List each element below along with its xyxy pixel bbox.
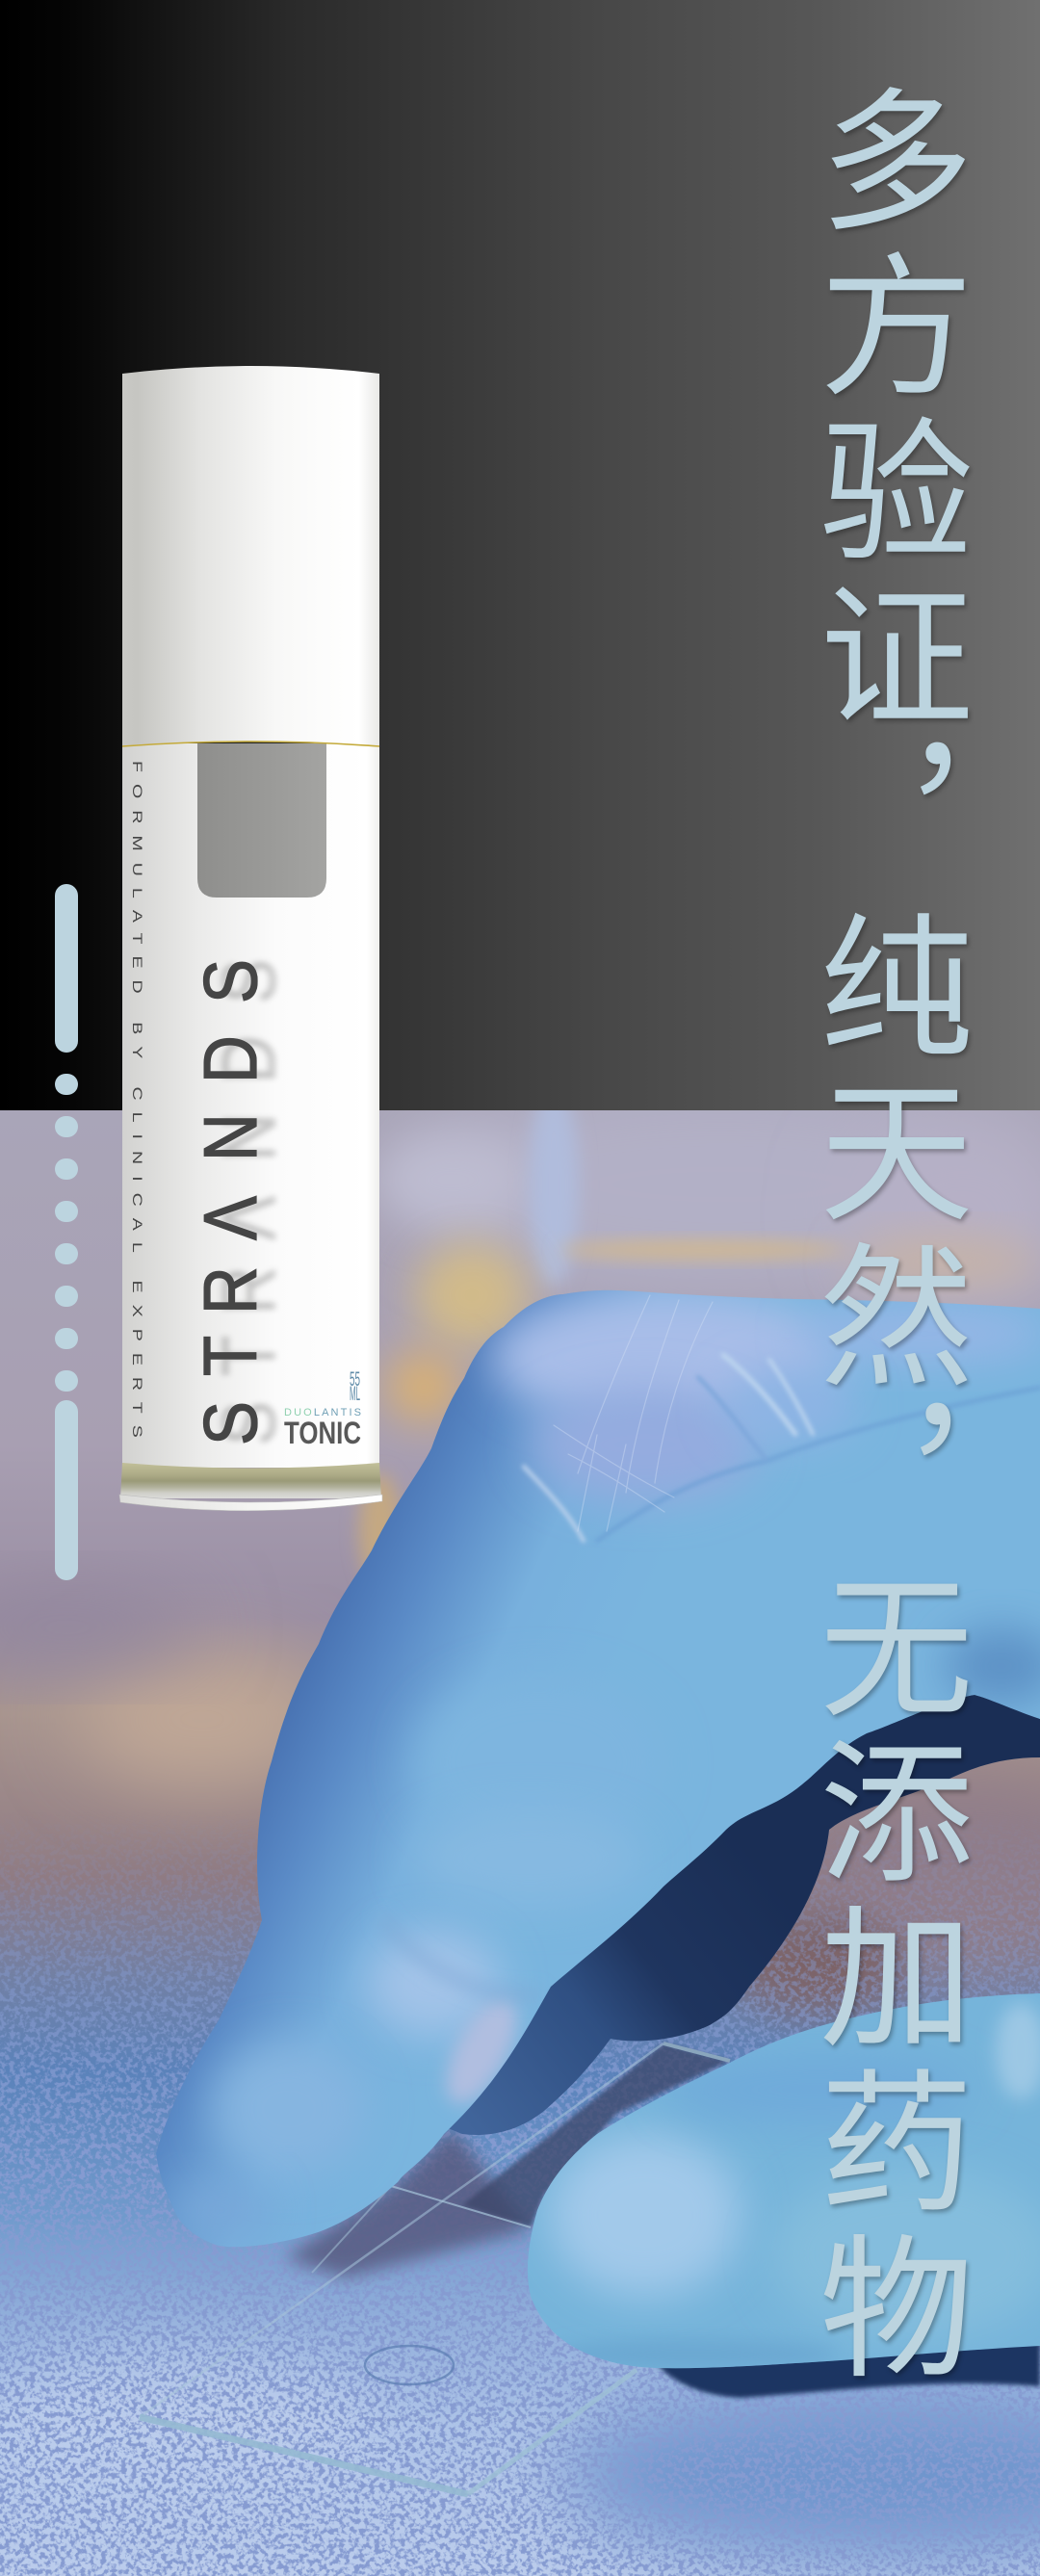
photo backdrop: [0, 1059, 1040, 2576]
top dark gradient panel: [0, 0, 1040, 1110]
thumb: [520, 1984, 1040, 2379]
grain texture of bench: [0, 1782, 1040, 2576]
vertical progress dots: [55, 884, 78, 1580]
gray window tab: [197, 743, 326, 898]
dark area behind finger: [424, 1690, 1040, 2135]
shadow beneath fingertip: [285, 2128, 531, 2277]
glass slide: [140, 2043, 730, 2494]
side text: FORMULATED BY CLINICAL EXPERTS: [130, 761, 144, 1438]
brand name STRANDS: STRΛNDS: [188, 959, 273, 1445]
bottle cap: [122, 366, 379, 746]
index finger: [144, 1281, 1040, 2253]
shadow under thumb: [657, 2340, 1040, 2398]
photo: gloved fingers holding glass slide: [0, 1110, 1040, 2576]
bottle base band: [120, 1463, 381, 1498]
vertical headline: 多方验证，纯天然，无添加药物: [797, 81, 970, 2393]
base lip: [119, 1495, 382, 1511]
volume label: [350, 1368, 360, 1405]
glove creases: [524, 1295, 1040, 1541]
droplet on slide: [365, 2346, 454, 2384]
product bottle: ML: [350, 1383, 360, 1405]
product bottle: 55: [350, 1368, 360, 1391]
product name TONIC: TONIC: [284, 1416, 361, 1450]
gold seam: [122, 742, 379, 746]
bottle body: [122, 743, 379, 1468]
product line: DUOLANTIS: [284, 1407, 361, 1418]
